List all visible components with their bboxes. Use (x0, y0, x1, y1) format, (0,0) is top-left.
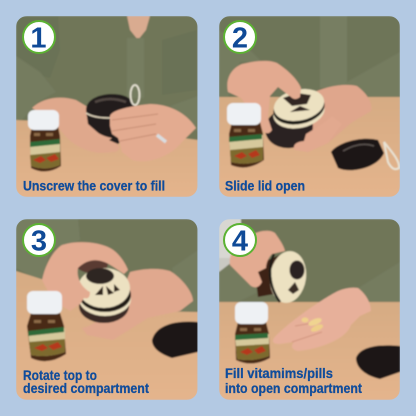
left hand (32, 96, 91, 127)
photo: pouring pills into palm (219, 219, 400, 400)
cover and cord (331, 139, 384, 170)
caption: step 1: Unscrew the cover to fill (23, 178, 165, 194)
jar body (256, 254, 280, 298)
badge: step 4 (224, 224, 256, 258)
left hand (227, 61, 301, 133)
right hand (110, 104, 196, 161)
badge: step 3: 3 (31, 226, 47, 258)
badge: step 3 (23, 224, 55, 258)
bottle (235, 322, 270, 364)
photo: woman holding closed container (16, 16, 198, 197)
lid (272, 108, 326, 130)
upper hand (230, 231, 285, 287)
bottle (27, 313, 66, 361)
panel 4: fill vitamins (219, 219, 400, 400)
cover (152, 322, 198, 358)
cover (356, 345, 400, 379)
caption: step 4: Fill vitamims/pills (225, 366, 333, 381)
badge: step 2 (224, 21, 256, 54)
caption: step 4 (225, 366, 362, 396)
panel 2: slide lid open (219, 16, 400, 197)
right hand back (316, 84, 368, 106)
bottle (229, 122, 264, 168)
caption: step 2: Slide lid open (225, 178, 305, 194)
badge: step 1: 1 (30, 22, 47, 54)
photo: hands rotating the top (16, 219, 198, 400)
caption: step 3: desired compartment (23, 381, 149, 396)
badge: step 1 (23, 21, 55, 54)
open hand (273, 288, 371, 351)
caption: step 3 (23, 368, 149, 396)
jar body (78, 304, 130, 324)
pills (302, 317, 324, 333)
caption: step 4: into open compartment (225, 381, 362, 396)
badge: step 2: 2 (232, 22, 248, 54)
bottle (30, 126, 61, 172)
lid (269, 250, 308, 304)
jar (265, 113, 314, 149)
left hand (42, 242, 128, 311)
right hand (126, 268, 194, 313)
lid (79, 297, 132, 318)
caption: step 3: Rotate top to (23, 368, 97, 383)
panel 3: rotate top (16, 219, 198, 400)
front fingers of right hand (292, 129, 314, 148)
shadow between fingers (78, 260, 108, 273)
photo: hands sliding the lid (219, 16, 400, 197)
panel 1: unscrew the cover (16, 16, 198, 197)
badge: step 4: 4 (232, 226, 248, 258)
